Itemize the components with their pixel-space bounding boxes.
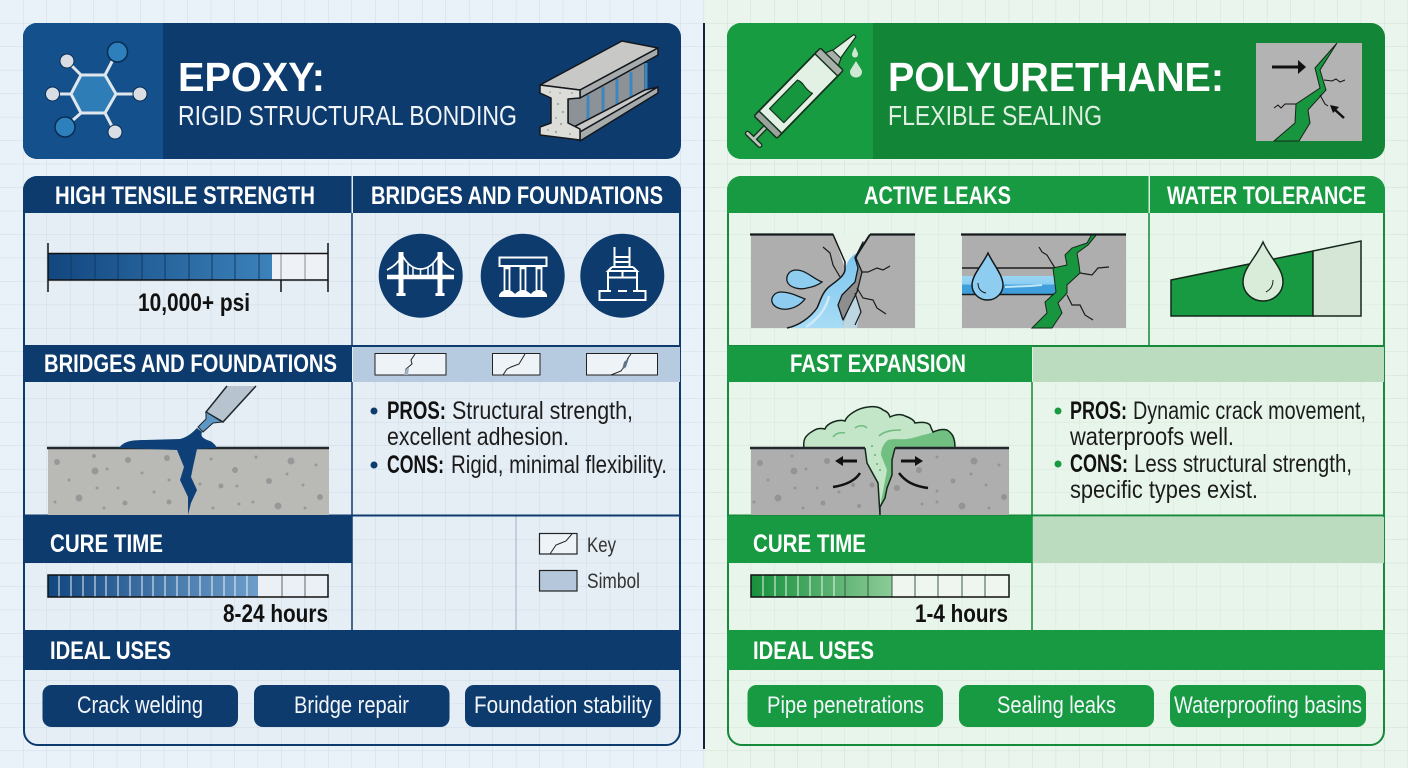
panel: epoxy bbox=[23, 23, 681, 745]
pill: pipe penetrations: Pipe penetrations bbox=[767, 692, 924, 719]
pros and cons bbox=[370, 397, 667, 479]
tensile strength heading: HIGH TENSILE STRENGTH bbox=[55, 182, 315, 210]
pros and cons: waterproofs well. bbox=[1069, 423, 1234, 451]
pros and cons: PROS: bbox=[1070, 397, 1127, 425]
icon: droplets bbox=[850, 47, 862, 78]
illustration: water in pipe and sealed crack bbox=[961, 234, 1126, 328]
cure time: CURE TIME bbox=[753, 530, 866, 558]
pros and cons: Structural strength, bbox=[452, 397, 633, 425]
filling heading: BRIDGES AND FOUNDATIONS bbox=[44, 350, 337, 378]
ideal uses: IDEAL USES bbox=[753, 637, 874, 665]
legend: Simbol bbox=[587, 570, 640, 593]
strength bar bbox=[48, 243, 328, 317]
pill: waterproofing basins bbox=[1170, 685, 1366, 727]
tensile strength heading: BRIDGES AND FOUNDATIONS bbox=[371, 182, 663, 210]
pill: bridge repair: Bridge repair bbox=[294, 692, 409, 719]
fast expansion heading bbox=[727, 346, 1384, 382]
pill: pipe penetrations bbox=[748, 685, 943, 727]
pill: foundation stability bbox=[465, 685, 660, 727]
epoxy title: EPOXY: bbox=[178, 54, 325, 100]
pros and cons bbox=[1054, 397, 1366, 504]
pros and cons: Rigid, minimal flexibility. bbox=[451, 451, 667, 479]
filling heading bbox=[23, 346, 680, 382]
active leaks and water tolerance headings bbox=[727, 176, 1385, 213]
chart: water tolerance bbox=[1171, 241, 1361, 316]
cure time bar bbox=[751, 575, 1009, 597]
pill: crack welding bbox=[42, 685, 238, 727]
polyurethane header banner bbox=[727, 23, 1385, 159]
legend bbox=[540, 534, 640, 593]
ideal uses bbox=[727, 630, 1385, 727]
pros and cons: excellent adhesion. bbox=[387, 423, 569, 451]
ideal uses bbox=[23, 630, 681, 727]
icon: concrete I-beam bbox=[540, 41, 658, 141]
icon: columns bbox=[481, 234, 565, 318]
pill: foundation stability: Foundation stability bbox=[474, 692, 652, 719]
pill: waterproofing basins: Waterproofing basins bbox=[1174, 692, 1362, 719]
polyurethane comparison card bbox=[727, 176, 1385, 745]
illustration: foam expansion bbox=[750, 407, 1009, 515]
icon: molecule bbox=[46, 42, 147, 139]
cure time bar bbox=[48, 575, 328, 597]
pros and cons: specific types exist. bbox=[1070, 476, 1258, 504]
cure time value: 1-4 hours bbox=[915, 600, 1008, 628]
epoxy header banner bbox=[23, 23, 681, 159]
active leaks and water tolerance headings: ACTIVE LEAKS bbox=[864, 182, 1011, 210]
fast expansion heading: FAST EXPANSION bbox=[790, 350, 966, 378]
pill: sealing leaks: Sealing leaks bbox=[997, 692, 1116, 719]
polyurethane title: POLYURETHANE: bbox=[888, 54, 1224, 100]
legend: Key bbox=[587, 534, 616, 557]
tensile strength heading bbox=[23, 176, 681, 213]
crack thumbnails bbox=[375, 354, 658, 375]
pros and cons: CONS: bbox=[387, 451, 444, 479]
illustration: leak through crack bbox=[750, 234, 915, 328]
icon: sealed crack bbox=[1256, 43, 1362, 141]
polyurethane subtitle: FLEXIBLE SEALING bbox=[888, 100, 1102, 131]
cure time value: 8-24 hours bbox=[223, 600, 328, 628]
pill: bridge repair bbox=[254, 685, 450, 727]
strength value: 10,000+ psi bbox=[138, 289, 250, 317]
pros and cons: CONS: bbox=[1070, 450, 1128, 478]
panel: polyurethane bbox=[727, 23, 1385, 745]
cure time: CURE TIME bbox=[50, 530, 163, 558]
ideal uses: IDEAL USES bbox=[50, 637, 171, 665]
pill: crack welding: Crack welding bbox=[77, 692, 203, 719]
icon: foundation bbox=[580, 234, 664, 318]
pros and cons: PROS: bbox=[387, 397, 446, 425]
icon: bridge bbox=[379, 234, 463, 318]
cure time bbox=[727, 516, 1384, 628]
pros and cons: Less structural strength, bbox=[1134, 450, 1352, 478]
illustration: epoxy injected into crack bbox=[47, 386, 329, 515]
cure time bbox=[23, 516, 352, 628]
epoxy subtitle: RIGID STRUCTURAL BONDING bbox=[178, 100, 517, 131]
epoxy comparison card bbox=[23, 176, 681, 745]
pill: sealing leaks bbox=[959, 685, 1154, 727]
icon: caulk gun bbox=[742, 24, 866, 151]
center divider bbox=[703, 23, 705, 749]
